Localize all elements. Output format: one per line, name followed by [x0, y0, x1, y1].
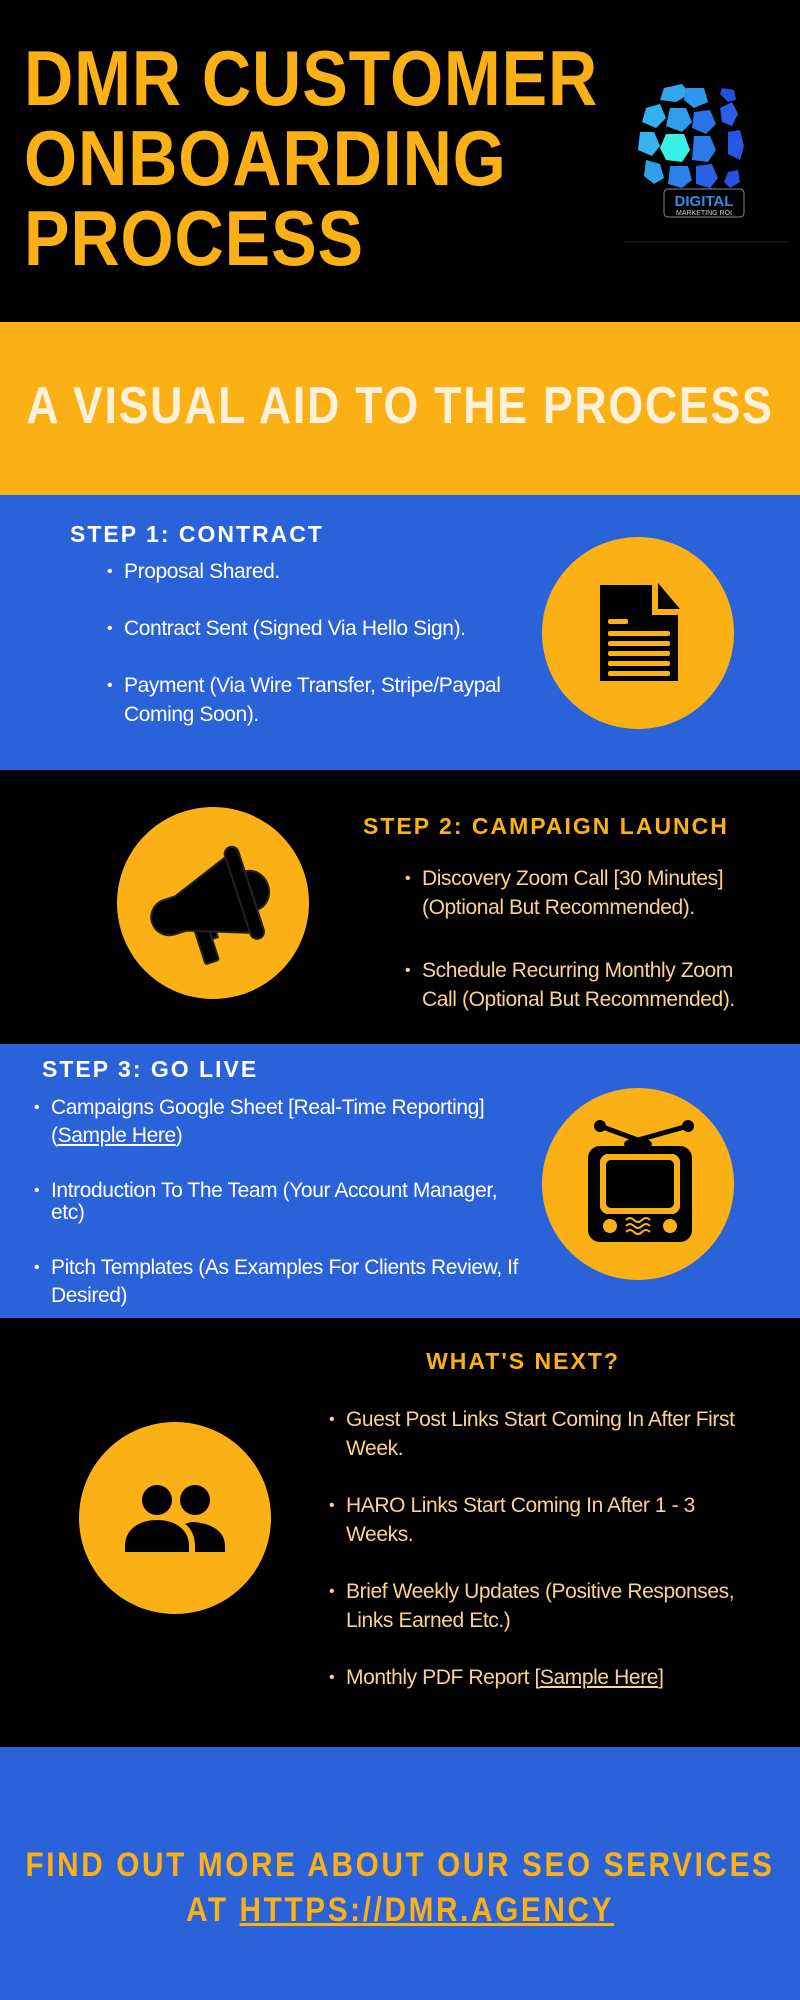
panel: step 3: [0, 1044, 800, 1318]
what's next bullets: Guest Post Links Start Coming In After First Week.: [346, 1408, 735, 1460]
step 2 heading: STEP 2: CAMPAIGN LAUNCH: [363, 813, 729, 839]
what's next bullets: Monthly PDF Report [Sample Here]: [346, 1666, 664, 1689]
icon: megaphone: [117, 807, 309, 999]
icon: tv: [542, 1088, 734, 1280]
title: DMR CUSTOMER: [24, 34, 598, 122]
icon: people: [79, 1422, 271, 1614]
footer panel: [0, 1747, 800, 2000]
logo: MARKETING ROI: [676, 210, 732, 217]
step 2 bullets: Schedule Recurring Monthly Zoom Call (Optional But Recommended).: [422, 959, 735, 1011]
title: PROCESS: [24, 194, 364, 282]
footer call to action: AT HTTPS://DMR.AGENCY: [186, 1891, 614, 1929]
step 3 bullets: Pitch Templates (As Examples For Clients Review, If Desired): [51, 1256, 518, 1307]
step 3 bullets: [34, 1096, 518, 1307]
step 3 bullets: Introduction To The Team (Your Account Manager, etc): [51, 1179, 497, 1224]
footer call to action: [25, 1846, 775, 1929]
icon: document: [542, 537, 734, 729]
step 2 bullets: Discovery Zoom Call [30 Minutes] (Optional But Recommended).: [422, 867, 723, 919]
footer call to action: FIND OUT MORE ABOUT OUR SEO SERVICES: [25, 1846, 775, 1884]
step 3 heading: STEP 3: GO LIVE: [42, 1056, 258, 1082]
step 1 heading: STEP 1: CONTRACT: [70, 521, 324, 547]
logo: [624, 84, 789, 242]
step 1 bullets: Contract Sent (Signed Via Hello Sign).: [124, 617, 466, 640]
subtitle band: [0, 322, 800, 495]
panel: what's next: [0, 1318, 800, 1747]
panel: step 1: [0, 495, 800, 770]
what's next bullets: Brief Weekly Updates (Positive Responses, Links Earned Etc.): [346, 1580, 734, 1632]
step 1 bullets: Payment (Via Wire Transfer, Stripe/Paypal Coming Soon).: [124, 674, 501, 726]
step 1 bullets: Proposal Shared.: [124, 560, 280, 583]
step 1 bullets: [108, 560, 501, 726]
title: ONBOARDING: [24, 114, 507, 202]
step 3 bullets: Campaigns Google Sheet [Real-Time Reporting] (Sample Here): [51, 1096, 484, 1147]
step 2 bullets: [406, 867, 735, 1011]
title: [24, 34, 598, 282]
header panel: [0, 0, 800, 322]
panel: step 2: [0, 770, 800, 1044]
logo: DIGITAL: [675, 193, 733, 210]
what's next bullets: HARO Links Start Coming In After 1 - 3 Weeks.: [346, 1494, 695, 1546]
subtitle text: A VISUAL AID TO THE PROCESS: [26, 377, 774, 435]
what's next heading: WHAT'S NEXT?: [426, 1348, 620, 1374]
what's next bullets: [330, 1408, 735, 1689]
